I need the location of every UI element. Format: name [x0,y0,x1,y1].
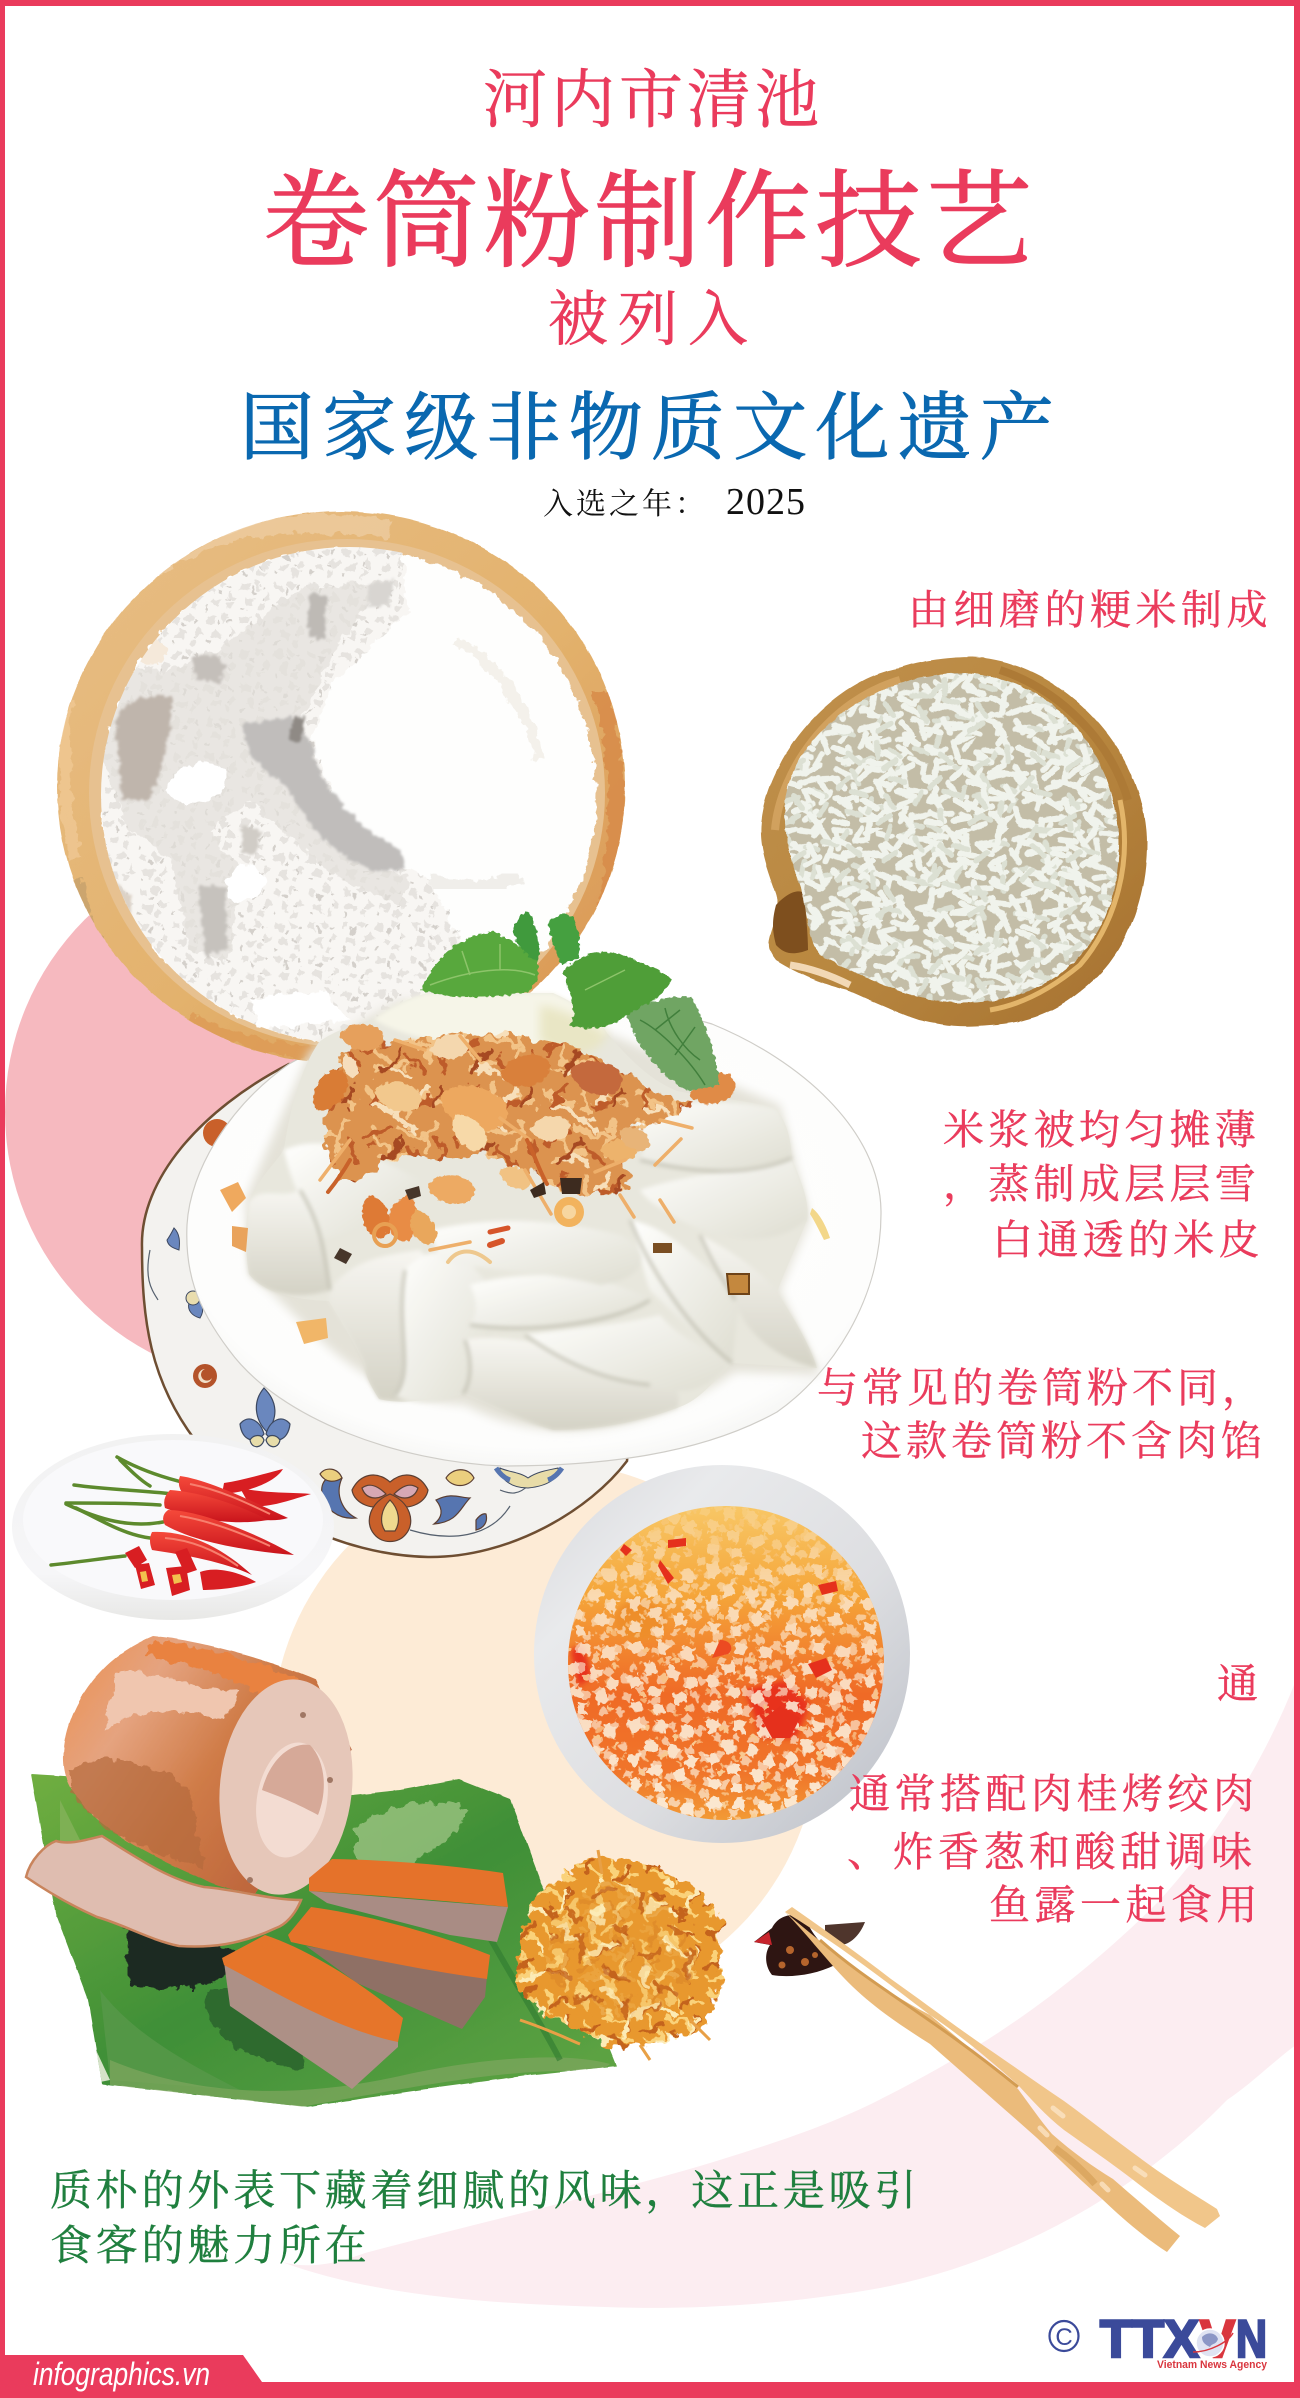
caption: accompaniments: 通常搭配肉桂烤绞肉 [849,1771,1258,1817]
copyright mark [1050,2321,1078,2351]
caption: steamed sheets: ，蒸制成层层雪 [943,1161,1260,1207]
caption: closing note: 食客的魅力所在 [50,2224,371,2270]
pork slab middle [288,1907,490,2029]
caption: closing note [50,2168,920,2270]
noodle silhouette [246,993,817,1430]
plate motif: orange floral bottom [320,1469,487,1542]
pork slab back [309,1859,508,1942]
rice bowl body [761,657,1147,1026]
mint leaves [421,912,719,1091]
chopsticks [785,1907,1220,2252]
flour base [102,548,596,1042]
title block [240,65,1062,523]
plate motif: orange dots [193,1119,231,1388]
shallot flakes [306,1024,740,1248]
TTXVN wordmark: N [1236,2310,1267,2369]
fried shallot pile [518,1850,721,2060]
bowl rim [57,511,625,1063]
title line 4: 国家级非物质文化遗产 [240,388,1062,470]
title line 1: 河内市清池 [483,65,823,136]
year label: 2025 [726,481,806,523]
red chili glow [570,1644,810,1738]
chili plate [12,1434,334,1620]
plate motif: tendrils and bow [148,1250,530,1536]
title line 3: 被列入 [548,287,758,353]
rice noodle rolls [220,912,830,1430]
year label: 入选之年： [543,488,708,521]
chili peppers [51,1457,311,1596]
fish sauce [568,1506,884,1820]
scattered shallot bits [320,1036,692,1262]
pork slice under roll [26,1836,301,1947]
dipping sauce bowl [534,1465,910,1843]
caption: no meat filling: 与常见的卷筒粉不同， [817,1365,1267,1411]
logo globe [1193,2329,1233,2357]
pork roll [63,1636,363,1901]
bowl inner wall [89,539,605,1047]
fried shallots on noodles [220,1024,830,1344]
caption: accompaniments [847,1661,1262,1928]
plate motif: blue fleur left [167,1228,203,1318]
TTXVN wordmark: TTX [1100,2310,1199,2369]
roll hole [247,1737,337,1863]
plate motif: blue fleur bottom [240,1388,290,1447]
caption: accompaniments: 通 [1217,1661,1262,1707]
chili plate dish [12,1434,334,1620]
footer site label: infographics.vn [33,2356,210,2392]
logo tagline: Vietnam News Agency [1157,2359,1268,2371]
caption: no meat filling [817,1365,1267,1464]
TTXVN wordmark: V [1200,2310,1235,2369]
rice bowl [761,657,1147,1026]
roll cut face [209,1673,363,1901]
caption: steamed sheets: 米浆被均匀摊薄 [943,1107,1260,1153]
white plate [187,1005,881,1466]
rice grains [784,672,1120,1004]
caption: rice: 由细磨的粳米制成 [908,587,1272,633]
decorated plate [142,1064,640,1557]
caption: no meat filling: 这款卷筒粉不含肉馅 [861,1418,1266,1464]
shallot mass [326,1034,690,1195]
banana leaf [31,1774,617,2107]
agency logo [1050,2310,1268,2371]
flour bowl [57,511,625,1063]
background crescent: pale pink [282,1680,1296,2308]
roast pork on banana leaf [26,1636,721,2107]
chopstick rest: duck [754,1915,865,1976]
background circle: pink [5,840,549,1384]
background circle: cream [272,1462,818,2008]
pork slab front [222,1935,403,2089]
title line 2: 卷筒粉制作技艺 [263,164,1036,281]
flour shading [90,528,540,1050]
copyright mark: C [1055,2324,1073,2351]
noodle folds [246,993,817,1430]
sauce bowl rim [534,1465,910,1843]
caption: steamed sheets [943,1107,1264,1263]
noodle shadow [245,1000,820,1430]
red chili bits [620,1538,838,1738]
caption: accompaniments: 鱼露一起食用 [989,1882,1262,1928]
garlic pieces [568,1506,884,1820]
footer tab [0,2355,262,2398]
caption: closing note: 质朴的外表下藏着细腻的风味，这正是吸引 [50,2168,920,2215]
caption: accompaniments: 、炸香葱和酸甜调味 [847,1829,1256,1875]
caption: steamed sheets: 白通透的米皮 [992,1217,1264,1263]
TTXVN wordmark [1100,2310,1267,2369]
